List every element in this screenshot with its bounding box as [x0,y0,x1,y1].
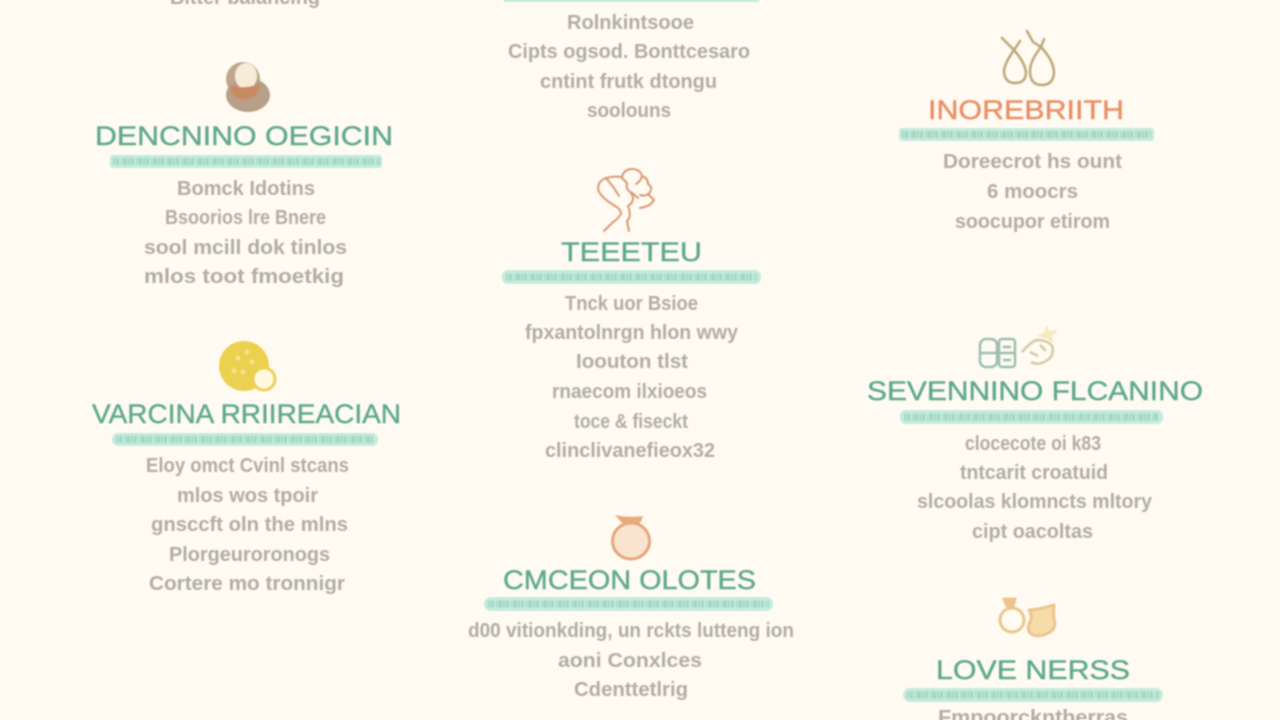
heading: TEEETEU [561,237,702,267]
panel: Dencnino Oegicin [95,62,393,288]
body text [917,433,1153,543]
body text: Tnck uor Bsioe [565,293,698,315]
icon: yellow fruit [219,341,275,391]
body text: tntcarit croatuid [960,462,1108,484]
panel: top of centre column [503,0,760,122]
body text: rnaecom ilxioeos [552,381,707,403]
body text: Plorgeuroronogs [169,544,330,566]
body text: Bomck Idotins [177,178,315,200]
heading: LOVE NERSS [936,655,1130,685]
icon: two pears [1002,31,1054,85]
underline bar [899,128,1154,141]
body text: cntint frutk dtongu [540,71,717,93]
panel: Varcina Rriireacian [92,341,401,595]
panel: Teeeteu [502,169,761,462]
icon: jar and leaves [1000,599,1055,636]
body text: d00 vitionkding, un rckts lutteng ion [468,620,794,642]
body text: Cortere mo tronnigr [149,573,345,595]
body text: toce & fiseckt [574,411,688,433]
heading: SEVENNINO FLCANINO [867,376,1203,406]
panel: Cmceon Olotes [468,515,794,701]
body text: aoni Conxlces [558,650,702,672]
body text: soolouns [587,100,671,122]
body text: clinclivanefieox32 [545,440,715,462]
body text: Doreecrot hs ount [943,151,1122,173]
body text: mlos wos tpoir [177,485,318,507]
underline bar [110,155,382,168]
body text: Ioouton tlst [576,351,688,373]
heading: CMCEON OLOTES [503,565,756,595]
body text: 6 moocrs [987,181,1078,203]
body text: Rolnkintsooe [567,12,694,34]
underline bar [112,433,378,446]
body text: mlos toot fmoetkig [144,266,344,288]
body text [468,620,794,701]
body text [525,293,739,462]
body text: Eloy omct Cvinl stcans [146,455,349,477]
body text: fpxantolnrgn hlon wwy [525,322,739,344]
underline bar [903,688,1163,702]
icon: flower outline [598,169,654,231]
body text: cipt oacoltas [972,521,1093,543]
body text: sool mcill dok tinlos [144,237,347,259]
body text [144,178,347,288]
icon: clay pot [612,515,650,559]
panel: Inorebriith [899,31,1154,233]
body text: Cipts ogsod. Bonttcesaro [508,41,750,63]
icon: blocks and citrus [980,326,1057,367]
body text: gnsccft oln the mlns [151,514,348,536]
underline bar [900,410,1163,424]
body text [943,151,1122,233]
heading: DENCNINO OEGICIN [95,121,393,151]
body text: slcoolas klomncts mltory [917,491,1153,513]
panel: Sevennino Flcanino [867,326,1203,543]
body text: Bsoorios lre Bnere [165,207,326,229]
body text: clocecote oi k83 [965,433,1101,455]
body text [146,455,349,595]
heading: INOREBRIITH [928,95,1124,125]
body text: Cdenttetlrig [574,679,688,701]
heading: VARCINA RRIIREACIAN [92,399,401,429]
icon: basket with egg [226,62,270,112]
body text [508,12,750,122]
underline bar [503,0,760,2]
underline bar [502,270,761,284]
panel: Love Nerss [903,599,1163,720]
body text: soocupor etirom [955,211,1110,233]
underline bar [484,597,773,611]
